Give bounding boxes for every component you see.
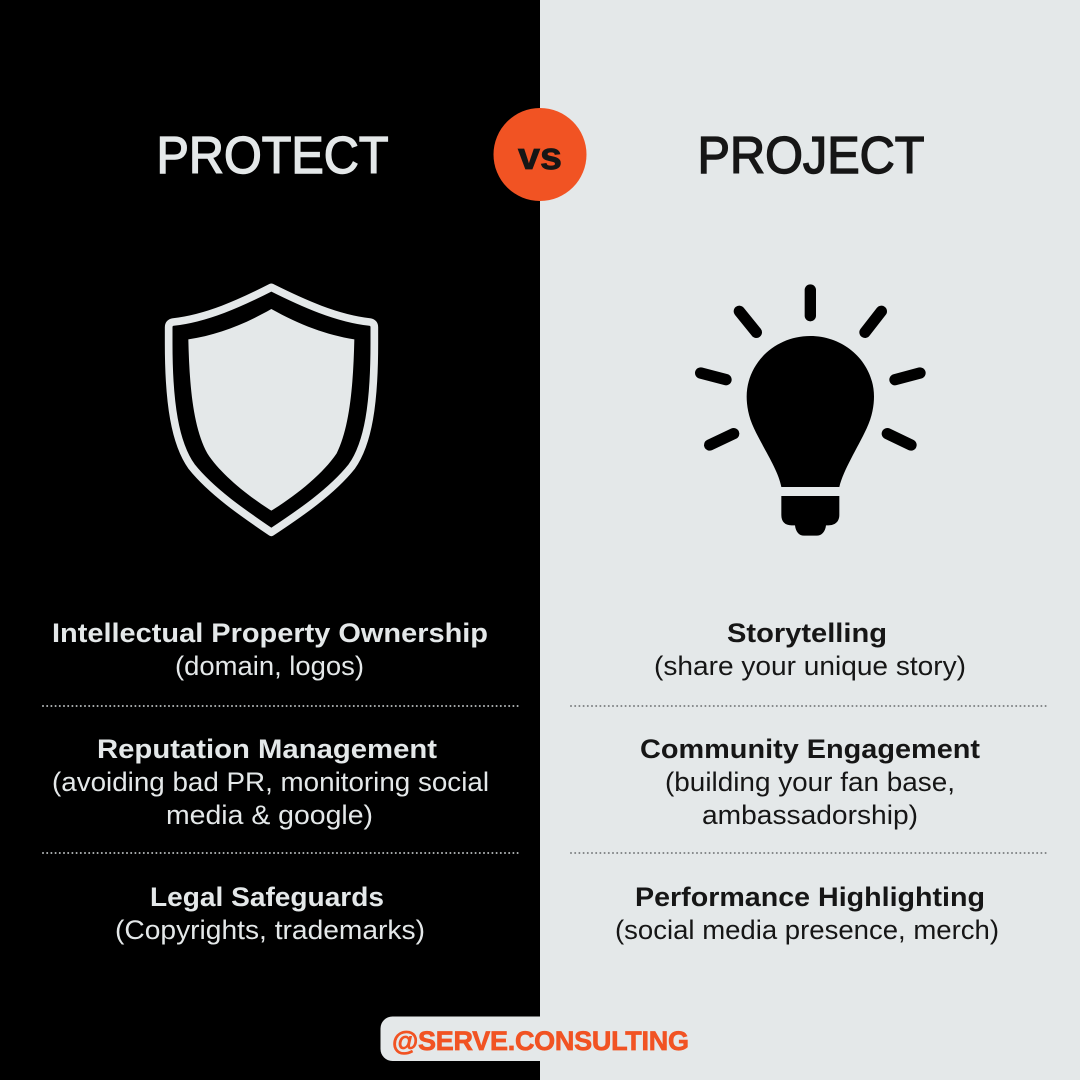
heading: protect: PROTECT	[156, 127, 388, 185]
text block: intellectual property ownership	[52, 618, 488, 681]
panel: protect background	[0, 0, 540, 1080]
text block: legal safeguards: Legal Safeguards	[150, 882, 384, 912]
text block: performance highlighting: (social media presence, merch)	[615, 915, 999, 945]
heading: project: PROJECT	[698, 127, 924, 185]
badge: vs: vs	[518, 136, 562, 178]
text block: legal safeguards: (Copyrights, trademarks)	[115, 915, 425, 945]
text block: legal safeguards	[115, 882, 425, 945]
text block: performance highlighting: Performance Highlighting	[635, 882, 985, 912]
text block: intellectual property ownership: (domain, logos)	[175, 651, 364, 681]
footer handle: @SERVE.CONSULTING	[392, 1026, 689, 1056]
text block: community engagement: Community Engagement	[640, 734, 980, 764]
icon: shield	[169, 287, 374, 532]
text block: reputation management	[52, 734, 489, 830]
text block: reputation management: Reputation Management	[97, 734, 437, 764]
text block: community engagement: ambassadorship)	[702, 800, 918, 830]
text block: storytelling: (share your unique story)	[654, 651, 966, 681]
badge: vs	[494, 108, 586, 201]
text block: community engagement	[640, 734, 980, 830]
text block: storytelling	[654, 618, 966, 681]
text block: performance highlighting	[615, 882, 999, 945]
panel: project background	[540, 0, 1080, 1080]
text block: reputation management: media & google)	[166, 800, 373, 830]
text block: intellectual property ownership: Intellectual Property Ownership	[52, 618, 488, 648]
text block: community engagement: (building your fan base,	[665, 767, 955, 797]
text block: reputation management: (avoiding bad PR, monitoring social	[52, 767, 489, 797]
icon: light bulb	[701, 290, 920, 536]
text block: storytelling: Storytelling	[727, 618, 887, 648]
footer handle	[380, 1016, 689, 1061]
